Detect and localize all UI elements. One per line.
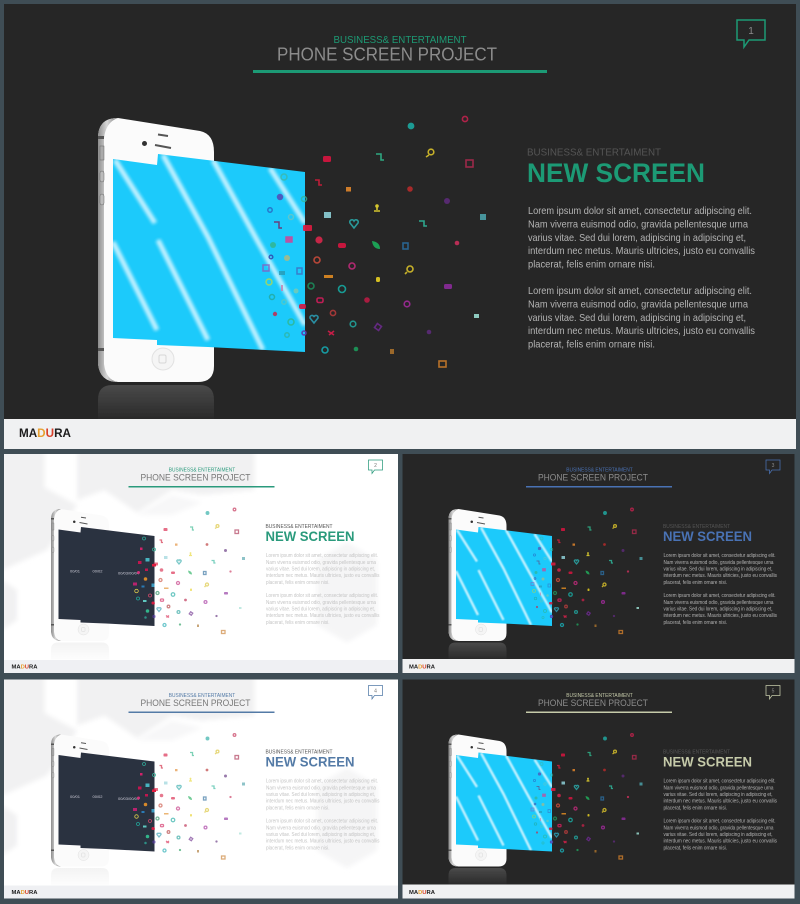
slide 3: dark blue slide <box>402 454 794 673</box>
body copy: interdum nec metus. Mauris ultricies, justo eu convallis <box>664 798 777 804</box>
slide heading: BUSINESS& ENTERTAIMENT <box>566 693 633 699</box>
slide heading: PHONE SCREEN PROJECT <box>277 44 497 64</box>
phone mockup <box>51 734 109 866</box>
slide heading <box>253 34 547 73</box>
speech bubble page number: 2 <box>374 463 377 469</box>
icons on screen <box>133 537 156 619</box>
slide heading: BUSINESS& ENTERTAIMENT <box>566 468 633 474</box>
body copy: Lorem ipsum dolor sit amet, consectetur adipiscing elit. <box>528 285 752 297</box>
body copy: Nam viverra euismod odio, gravida pellentesque urna <box>664 600 774 606</box>
icons on screen <box>133 762 156 844</box>
screen labels: 00/01 <box>70 568 81 574</box>
body copy: Lorem ipsum dolor sit amet, consectetur adipiscing elit. <box>266 778 378 784</box>
phone mockup <box>98 118 214 382</box>
body copy: Nam viverra euismod odio, gravida pellentesque urna <box>664 785 774 791</box>
screen labels <box>70 794 140 801</box>
text: new screen: NEW SCREEN <box>663 754 752 770</box>
body copy: interdum nec metus. Mauris ultricies, justo eu convallis <box>664 838 777 844</box>
icons on screen <box>531 537 553 619</box>
speech bubble page number: 3 <box>772 463 775 469</box>
body copy: varius vitae. Sed dui lorem, adipiscing in adipiscing et, <box>528 312 746 324</box>
body copy: interdum nec metus. Mauris ultricies, justo eu convallis <box>528 245 755 257</box>
screen labels: 00/02 <box>92 794 103 799</box>
body copy: varius vitae. Sed dui lorem, adipiscing in adipiscing et, <box>664 792 772 798</box>
body copy: varius vitae. Sed dui lorem, adipiscing in adipiscing et, <box>266 606 375 612</box>
body copy: placerat, felis enim ornare nisi. <box>266 580 330 586</box>
body copy: placerat, felis enim ornare nisi. <box>528 338 655 350</box>
body copy: interdum nec metus. Mauris ultricies, justo eu convallis <box>266 798 380 804</box>
body copy: Nam viverra euismod odio, gravida pellentesque urna <box>664 825 774 831</box>
slide 4: light blue slide <box>2 676 398 898</box>
slide heading <box>128 468 274 488</box>
speech bubble page number: 4 <box>374 688 377 694</box>
speech bubble page number <box>737 20 765 47</box>
body copy: interdum nec metus. Mauris ultricies, justo eu convallis <box>266 573 380 579</box>
slide 2: light green slide <box>2 450 398 673</box>
body copy: placerat, felis enim ornare nisi. <box>266 805 330 811</box>
body copy: placerat, felis enim ornare nisi. <box>664 805 727 811</box>
body copy <box>528 205 755 350</box>
text: new screen: BUSINESS& ENTERTAIMENT <box>663 749 731 755</box>
body copy: Nam viverra euismod odio, gravida pellentesque urna <box>664 560 774 566</box>
body copy: placerat, felis enim ornare nisi. <box>664 620 727 626</box>
body copy: Lorem ipsum dolor sit amet, consectetur adipiscing elit. <box>664 778 776 784</box>
body copy: interdum nec metus. Mauris ultricies, justo eu convallis <box>528 325 755 337</box>
body copy: varius vitae. Sed dui lorem, adipiscing in adipiscing et, <box>266 832 375 838</box>
slide heading <box>128 693 274 713</box>
phone reflection <box>51 642 109 660</box>
body copy: varius vitae. Sed dui lorem, adipiscing in adipiscing et, <box>266 792 375 798</box>
speech bubble page number: 1 <box>748 26 754 37</box>
speech bubble page number <box>766 460 780 474</box>
body copy: Nam viverra euismod odio, gravida pellentesque urna <box>266 785 376 791</box>
speech bubble page number <box>766 686 780 699</box>
icons on screen <box>531 762 553 844</box>
body copy <box>266 778 380 851</box>
slide heading: BUSINESS& ENTERTAIMENT <box>169 693 236 699</box>
screen labels: 00/03/00/04 <box>118 796 140 801</box>
phone reflection <box>51 868 109 885</box>
text: new screen: NEW SCREEN <box>266 529 354 544</box>
body copy: varius vitae. Sed dui lorem, adipiscing in adipiscing et, <box>664 566 772 572</box>
blue phone screen <box>113 154 305 352</box>
phone mockup <box>51 509 109 641</box>
body copy: Lorem ipsum dolor sit amet, consectetur adipiscing elit. <box>664 553 776 559</box>
body copy: Lorem ipsum dolor sit amet, consectetur adipiscing elit. <box>266 818 378 824</box>
footer bar <box>4 886 398 898</box>
phone reflection <box>98 385 214 419</box>
background hexagon pattern <box>4 454 374 639</box>
icons on screen <box>263 174 306 337</box>
screen labels <box>70 568 140 576</box>
logo: MADURA <box>409 664 435 670</box>
slide 5: dark olive slide <box>402 680 794 898</box>
dark phone screen <box>58 527 154 626</box>
phone mockup <box>448 734 506 866</box>
scattered app icons <box>152 508 245 634</box>
text: new screen: NEW SCREEN <box>266 754 354 770</box>
slide heading: BUSINESS& ENTERTAIMENT <box>169 468 236 474</box>
slide 1: large dark green slide <box>4 4 796 449</box>
footer bar <box>402 884 794 898</box>
slide heading <box>526 693 672 713</box>
body copy: interdum nec metus. Mauris ultricies, justo eu convallis <box>664 573 777 579</box>
body copy: Nam viverra euismod odio, gravida pellentesque urna <box>266 600 376 606</box>
slide heading: PHONE SCREEN PROJECT <box>538 698 648 708</box>
phone reflection <box>448 642 506 659</box>
body copy: Lorem ipsum dolor sit amet, consectetur adipiscing elit. <box>266 593 378 599</box>
body copy <box>664 553 777 626</box>
body copy <box>664 778 777 851</box>
speech bubble page number <box>368 460 382 474</box>
body copy: Nam viverra euismod odio, gravida pellentesque urna <box>528 218 748 230</box>
body copy: varius vitae. Sed dui lorem, adipiscing in adipiscing et, <box>528 232 746 244</box>
scattered app icons <box>549 508 642 634</box>
body copy: interdum nec metus. Mauris ultricies, justo eu convallis <box>664 613 777 619</box>
speech bubble page number <box>368 686 382 699</box>
body copy: placerat, felis enim ornare nisi. <box>266 620 330 626</box>
body copy: Lorem ipsum dolor sit amet, consectetur adipiscing elit. <box>664 818 776 824</box>
scattered app icons <box>549 734 642 859</box>
body copy <box>266 553 380 626</box>
body copy: varius vitae. Sed dui lorem, adipiscing in adipiscing et, <box>266 566 375 572</box>
screen labels: 00/02 <box>92 568 103 574</box>
logo: MADURA <box>19 428 71 440</box>
body copy: Lorem ipsum dolor sit amet, consectetur adipiscing elit. <box>266 553 378 559</box>
footer bar <box>402 659 794 673</box>
text: new screen: BUSINESS& ENTERTAIMENT <box>663 524 731 530</box>
text: new screen: BUSINESS& ENTERTAIMENT <box>527 146 662 158</box>
dark phone screen <box>58 752 154 852</box>
screen labels: 00/03/00/04 <box>118 570 140 576</box>
blue phone screen <box>456 527 552 626</box>
screen labels: 00/01 <box>70 794 81 799</box>
logo: MADURA <box>12 664 38 670</box>
body copy: interdum nec metus. Mauris ultricies, justo eu convallis <box>266 613 380 619</box>
text: new screen: NEW SCREEN <box>527 158 705 188</box>
body copy: placerat, felis enim ornare nisi. <box>266 845 330 851</box>
phone mockup <box>448 509 506 641</box>
footer bar <box>4 660 398 673</box>
body copy: varius vitae. Sed dui lorem, adipiscing in adipiscing et, <box>664 832 772 838</box>
body copy: Lorem ipsum dolor sit amet, consectetur adipiscing elit. <box>664 593 776 599</box>
text: new screen: BUSINESS& ENTERTAIMENT <box>266 524 333 530</box>
body copy: placerat, felis enim ornare nisi. <box>664 580 727 586</box>
scattered app icons <box>299 116 486 367</box>
logo: MADURA <box>409 890 435 896</box>
speech bubble page number: 5 <box>772 688 775 694</box>
body copy: interdum nec metus. Mauris ultricies, justo eu convallis <box>266 838 380 844</box>
slide heading: PHONE SCREEN PROJECT <box>140 472 251 482</box>
background hexagon pattern <box>4 680 374 864</box>
slide heading: BUSINESS& ENTERTAIMENT <box>334 34 467 46</box>
body copy: Lorem ipsum dolor sit amet, consectetur adipiscing elit. <box>528 205 752 217</box>
body copy: placerat, felis enim ornare nisi. <box>664 845 727 851</box>
body copy: Nam viverra euismod odio, gravida pellentesque urna <box>266 560 376 566</box>
text: new screen: BUSINESS& ENTERTAIMENT <box>266 749 333 755</box>
slide heading <box>526 468 672 488</box>
slide heading: PHONE SCREEN PROJECT <box>140 698 251 708</box>
scattered app icons <box>152 734 245 859</box>
logo: MADURA <box>12 890 38 896</box>
slide heading: PHONE SCREEN PROJECT <box>538 472 648 482</box>
body copy: varius vitae. Sed dui lorem, adipiscing in adipiscing et, <box>664 606 772 612</box>
body copy: Nam viverra euismod odio, gravida pellentesque urna <box>528 298 748 310</box>
blue phone screen <box>456 752 552 852</box>
body copy: Nam viverra euismod odio, gravida pellentesque urna <box>266 825 376 831</box>
body copy: placerat, felis enim ornare nisi. <box>528 258 655 270</box>
footer bar <box>4 419 796 449</box>
text: new screen: NEW SCREEN <box>663 529 752 544</box>
phone reflection <box>448 868 506 884</box>
